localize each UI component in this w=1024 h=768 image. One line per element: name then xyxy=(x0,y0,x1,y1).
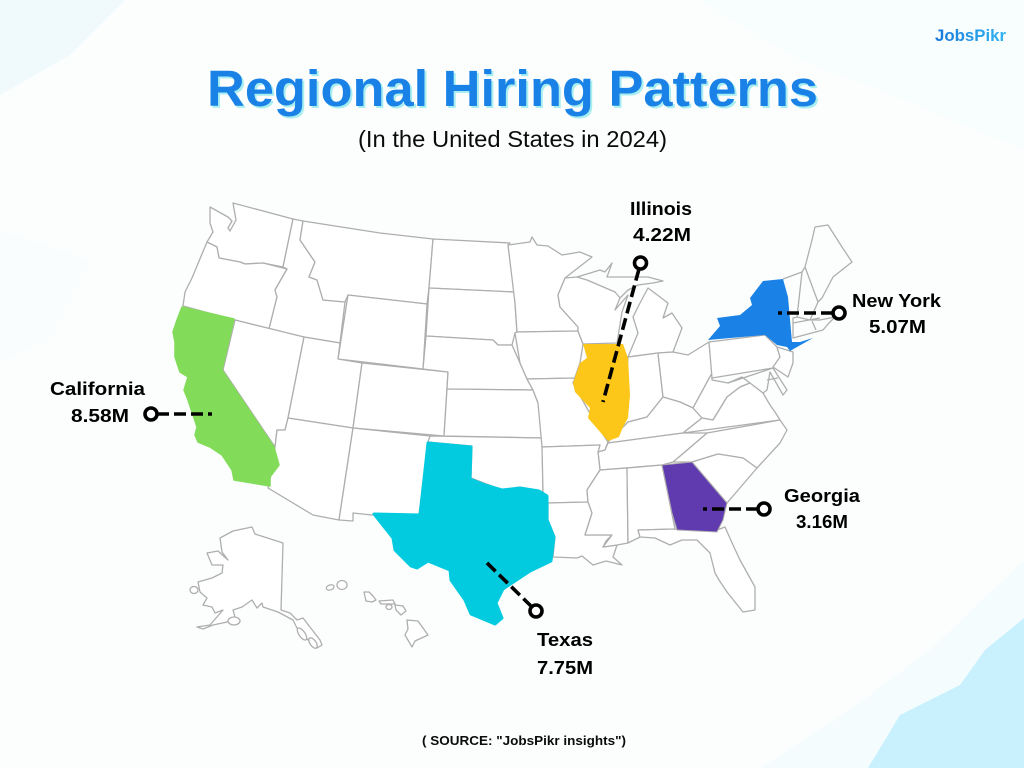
state: Montana xyxy=(300,221,433,304)
state: Indiana xyxy=(623,353,663,427)
state highlight: Texas xyxy=(374,443,554,624)
state: Oregon xyxy=(183,242,287,329)
callout: New York: 5.07M xyxy=(869,317,926,337)
title: Regional Hiring Patterns xyxy=(209,62,820,119)
state: Kentucky xyxy=(608,397,702,443)
state: Nebraska xyxy=(423,336,533,390)
state: Iowa xyxy=(515,331,583,383)
callout: Illinois: 4.22M xyxy=(633,225,691,245)
state: Colorado xyxy=(353,363,448,436)
callout: Georgia: 3.16M xyxy=(796,512,848,532)
state: Tennessee xyxy=(598,433,707,470)
callout: New York: New York xyxy=(852,291,942,311)
state: Hawaii xyxy=(326,580,428,647)
state: Minnesota xyxy=(508,237,592,332)
US map base xyxy=(183,203,852,650)
callout: Texas: 7.75M xyxy=(537,658,593,678)
source note: ( SOURCE: "JobsPikr insights") xyxy=(422,734,626,748)
callout: Illinois xyxy=(603,199,692,402)
title: Regional Hiring Patterns xyxy=(207,60,818,117)
state: Utah xyxy=(288,337,362,428)
state: Michigan upper xyxy=(577,263,663,298)
state: New Jersey xyxy=(773,347,793,377)
callout: Texas xyxy=(485,561,593,678)
state: South Dakota xyxy=(426,288,517,345)
state: Maryland and Delaware xyxy=(728,368,787,395)
callout: California xyxy=(50,379,212,426)
state: Missouri xyxy=(527,378,608,452)
state: Wyoming xyxy=(338,295,427,369)
state: New England xyxy=(783,225,852,338)
state: Mississippi xyxy=(585,468,628,547)
state: Louisiana xyxy=(548,502,622,565)
state: Idaho xyxy=(269,219,345,343)
state highlight: California xyxy=(173,307,279,486)
logo: JobsPikr: JobsPikr xyxy=(935,26,1006,45)
state: Wisconsin xyxy=(558,277,628,344)
state: New Mexico xyxy=(339,428,430,521)
state: South Carolina xyxy=(692,454,757,503)
callout: Illinois: Illinois xyxy=(630,199,692,219)
subtitle: (In the United States in 2024) xyxy=(358,126,667,152)
state: North Dakota xyxy=(429,239,515,292)
callout: Georgia xyxy=(703,486,861,532)
state: Alabama xyxy=(627,465,675,543)
callout: Georgia: Georgia xyxy=(784,486,861,506)
callout: Texas: Texas xyxy=(537,630,593,650)
state: Pennsylvania xyxy=(709,335,780,378)
state highlight: New York xyxy=(708,279,813,351)
state: Alaska xyxy=(197,527,322,648)
state: Nevada xyxy=(223,320,304,447)
state: Arkansas xyxy=(542,445,600,503)
state highlight: Georgia xyxy=(662,462,727,532)
state: West Virginia xyxy=(693,373,750,420)
state: Virginia xyxy=(683,383,780,433)
state: Washington xyxy=(207,203,293,267)
alaskan islands xyxy=(190,586,319,650)
state: Ohio xyxy=(658,342,712,408)
state highlight: Illinois xyxy=(573,344,630,441)
state: Kansas xyxy=(444,389,542,438)
state: Oklahoma xyxy=(428,436,543,492)
state: Florida xyxy=(638,527,755,612)
callout: California: 8.58M xyxy=(71,406,129,426)
state: Arizona xyxy=(268,418,353,520)
state: North Carolina xyxy=(673,420,787,468)
callout: California: California xyxy=(50,379,146,399)
callout: New York xyxy=(778,291,942,337)
state: Michigan lower xyxy=(628,288,682,357)
